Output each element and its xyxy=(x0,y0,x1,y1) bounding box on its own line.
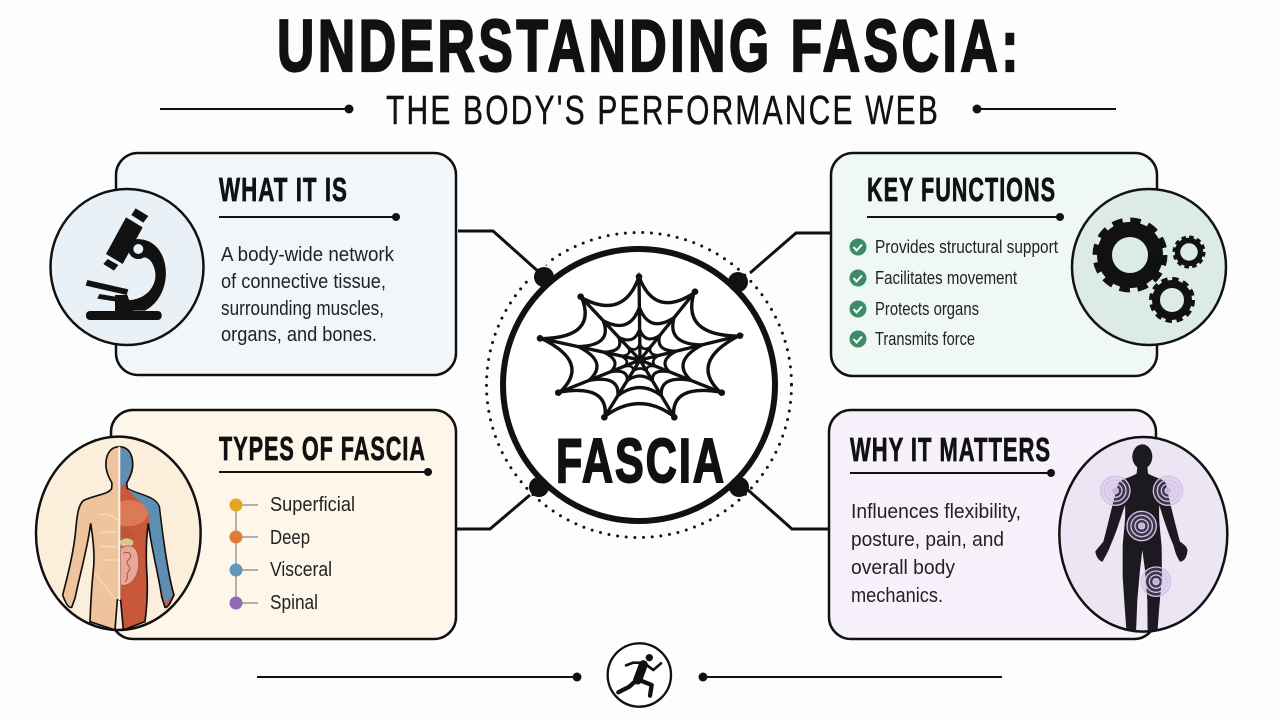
panel: key functions xyxy=(831,153,1157,376)
label: fascia: FASCIA xyxy=(556,427,726,496)
body text: A body-wide network xyxy=(221,244,395,266)
type list: Superficial xyxy=(270,494,355,516)
icon: spider web xyxy=(537,273,743,421)
body text: organs, and bones. xyxy=(221,324,377,346)
heading: key functions: KEY FUNCTIONS xyxy=(867,171,1056,208)
heading rule xyxy=(219,213,400,221)
connector lines xyxy=(457,231,830,529)
heading: why it matters: WHY IT MATTERS xyxy=(850,431,1051,468)
check list: Transmits force xyxy=(875,329,975,349)
panel: why it matters xyxy=(829,410,1156,639)
footer rule right xyxy=(698,672,1002,682)
body text xyxy=(851,501,1021,607)
type list: Spinal xyxy=(270,592,318,614)
gaps in dotted ring xyxy=(512,252,768,514)
icon: microscope xyxy=(50,189,204,345)
panel: what it is xyxy=(116,153,456,375)
type list: Deep xyxy=(270,527,310,549)
central fascia badge xyxy=(457,231,830,538)
subtitle with rules: THE BODY'S PERFORMANCE WEB xyxy=(386,87,940,133)
connector node dots xyxy=(529,267,749,497)
body text xyxy=(221,244,395,346)
icon: gears xyxy=(1072,189,1226,345)
footer rule left xyxy=(257,672,582,682)
heading: types of fascia: TYPES OF FASCIA xyxy=(219,430,426,467)
check list: Facilitates movement xyxy=(875,268,1017,288)
body text: overall body xyxy=(851,557,955,579)
type list xyxy=(230,494,355,614)
heading rule xyxy=(867,213,1064,221)
body text: mechanics. xyxy=(851,585,943,607)
heading: what it is: WHAT IT IS xyxy=(219,171,348,208)
heading rule xyxy=(850,469,1055,477)
icon: runner xyxy=(608,643,671,707)
heading rule xyxy=(219,468,432,476)
type list: Visceral xyxy=(270,559,332,581)
icon: body silhouette with pain points xyxy=(1059,437,1227,633)
check list: Provides structural support xyxy=(875,237,1058,257)
body text: Influences flexibility, xyxy=(851,501,1021,523)
body text: surrounding muscles, xyxy=(221,298,384,320)
check list: Protects organs xyxy=(875,299,979,319)
body text: of connective tissue, xyxy=(221,271,386,293)
panel: types of fascia xyxy=(111,410,456,639)
check list xyxy=(850,237,1058,349)
body text: posture, pain, and xyxy=(851,529,1004,551)
icon: human anatomy xyxy=(36,437,201,630)
